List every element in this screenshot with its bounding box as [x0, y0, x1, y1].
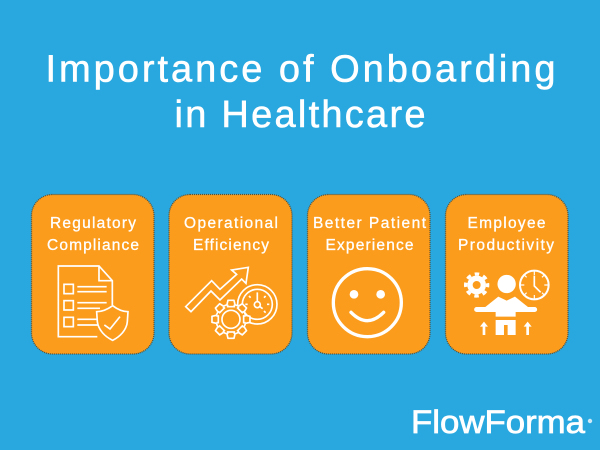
heading: better patient experience: Better Patient: [313, 215, 427, 232]
icon: person with gear, clock and arrows: [466, 271, 549, 335]
heading: operational efficiency: Efficiency: [193, 237, 269, 254]
heading: regulatory compliance: Compliance: [47, 237, 139, 254]
heading: better patient experience: Experience: [326, 237, 414, 254]
icon: smiley face: [333, 269, 401, 337]
icon: document with shield: [58, 266, 128, 340]
heading: employee productivity: Productivity: [458, 237, 554, 254]
heading: operational efficiency: [184, 215, 278, 254]
title: Importance of Onboarding: [46, 48, 556, 90]
heading: regulatory compliance: [47, 215, 139, 254]
panel: operational efficiency: [169, 194, 292, 354]
panel: better patient experience: [308, 194, 430, 354]
icon: arrow, gear and clock: [186, 267, 277, 338]
logo: FlowForma: FlowForma: [411, 404, 585, 440]
panel: regulatory compliance: [32, 194, 154, 354]
title: in Healthcare: [174, 94, 426, 136]
heading: operational efficiency: Operational: [184, 215, 278, 232]
panel: employee productivity: [446, 194, 568, 354]
heading: regulatory compliance: Regulatory: [50, 215, 136, 232]
heading: better patient experience: [313, 215, 427, 254]
heading: employee productivity: Employee: [468, 215, 546, 232]
heading: employee productivity: [458, 215, 554, 254]
title: [46, 48, 556, 136]
